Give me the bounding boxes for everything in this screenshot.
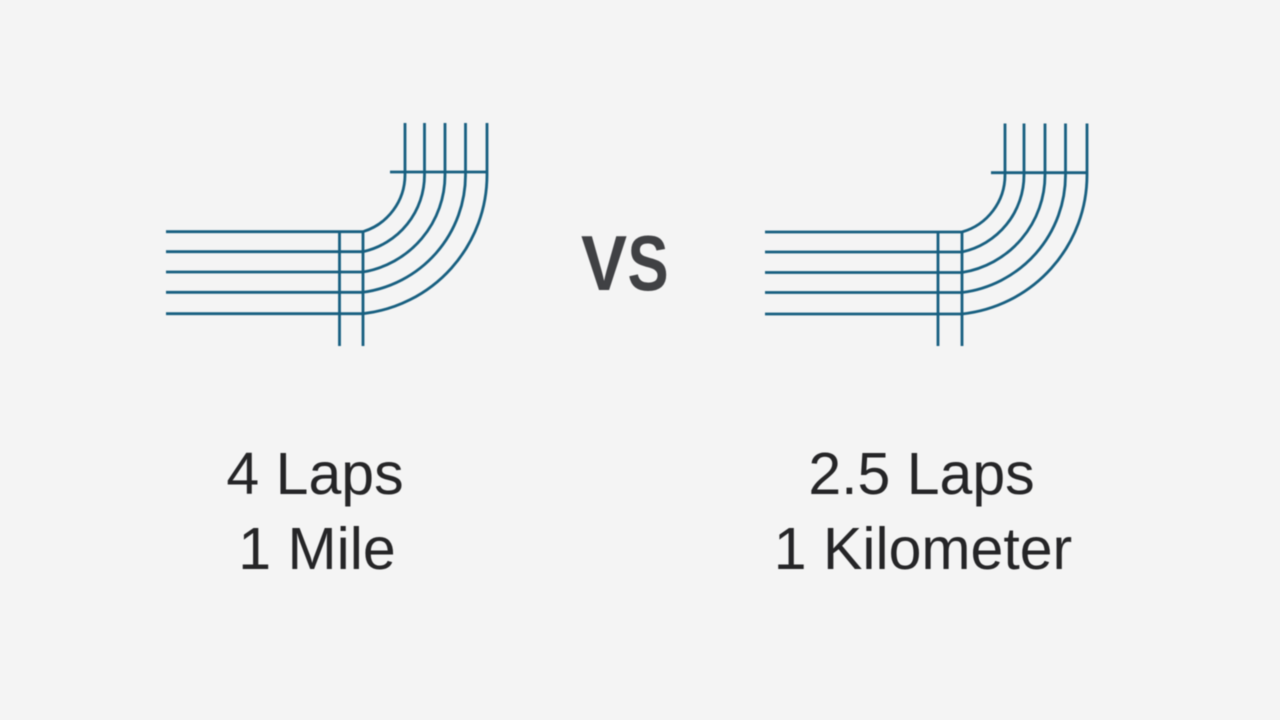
panel: right track, 2.5 laps [765,124,1087,346]
text block: left label: 1 Mile [238,516,396,582]
heading: VS: V [581,219,627,307]
text block: right label: 2.5 Laps [808,441,1035,507]
text block: left label [226,441,404,582]
text block: right label [774,441,1072,582]
text block: right label: 1 Kilometer [774,516,1072,582]
heading: VS: S [628,219,669,307]
heading: VS [581,219,669,307]
panel: left track, 4 laps [166,123,487,346]
text block: left label: 4 Laps [226,441,404,507]
